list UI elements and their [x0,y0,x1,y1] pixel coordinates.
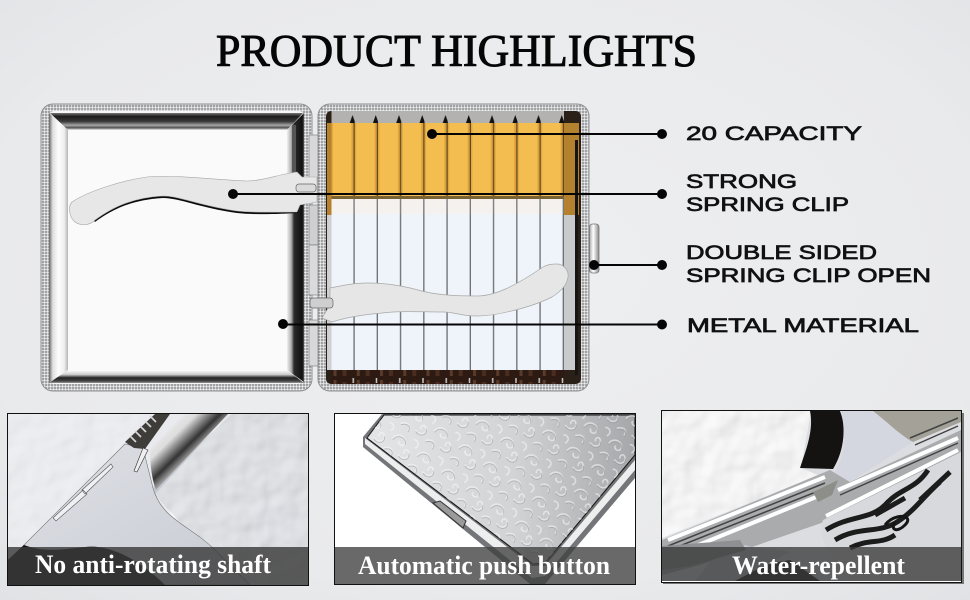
callout: double sided spring clip open: DOUBLE SIDED [686,242,877,264]
caption: No anti-rotating shaft [35,550,271,579]
lower clip spring [310,298,333,308]
cigarettes [332,111,564,384]
open case photo [41,104,599,391]
upper clip shadow [93,194,298,222]
upper clip spring [296,184,316,192]
callout: strong spring clip [228,171,849,216]
lower spring clip [322,264,568,322]
callout: strong spring clip: SPRING CLIP [686,194,849,216]
upper spring clip [70,172,317,225]
photo: engraved case corner [335,414,635,584]
callout: metal material: METAL MATERIAL [687,315,919,337]
photo: open case hinge [662,411,961,585]
callout: metal material [278,315,919,337]
callout: 20 capacity [427,123,862,145]
caption: Water-repellent [732,551,905,580]
callout: 20 capacity: 20 CAPACITY [686,123,862,145]
title: PRODUCT HIGHLIGHTS [216,26,697,76]
push button [590,224,599,273]
left lid of case [41,104,312,391]
photo: hinge plate close-up [8,414,308,585]
panel: no anti-rotating shaft [8,414,308,586]
callout: double sided spring clip open [589,242,931,287]
callout: strong spring clip: STRONG [686,171,797,193]
panel: automatic push button [334,414,636,584]
callout: double sided spring clip open: SPRING CLIP OPEN [686,265,931,287]
right tray of case [318,104,589,391]
panel: water-repellent [662,410,964,585]
hinge [309,135,318,366]
caption: Automatic push button [358,551,611,580]
